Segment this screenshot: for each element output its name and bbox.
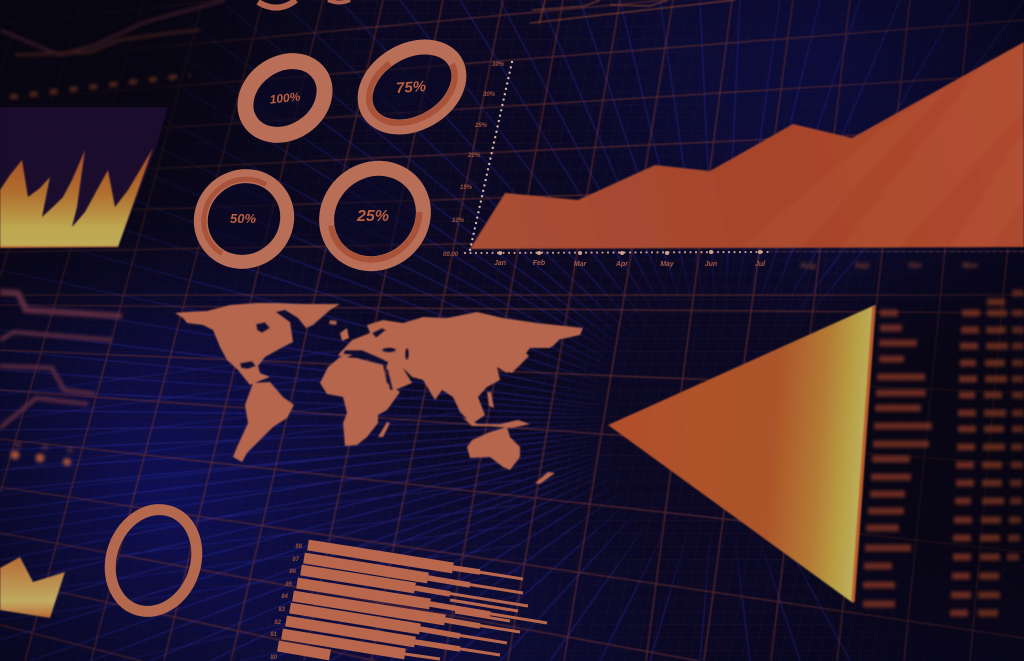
y axis labels: 15% bbox=[460, 185, 473, 191]
table values column 1 bbox=[950, 313, 980, 613]
funnel triangle bbox=[608, 305, 875, 603]
bars tapered middle bbox=[415, 568, 490, 649]
y axis labels bbox=[443, 62, 505, 258]
empty ring bbox=[96, 497, 211, 624]
Gulf of Mexico bbox=[240, 361, 256, 369]
bars solid bbox=[282, 545, 453, 654]
Philippines bbox=[487, 392, 494, 408]
x axis month dots bbox=[500, 252, 760, 253]
gauge 25%: 25% bbox=[356, 208, 389, 225]
bar labels: 83 bbox=[278, 607, 286, 613]
bar labels: 88 bbox=[295, 544, 303, 550]
bar labels: 82 bbox=[274, 620, 282, 626]
South America bbox=[233, 382, 294, 462]
bar labels: 80 bbox=[270, 655, 278, 661]
donut gauges bbox=[183, 31, 473, 283]
area fill bbox=[470, 42, 1024, 249]
y axis dots bbox=[470, 62, 512, 250]
Sakhalin bbox=[548, 337, 560, 347]
gauge 75%: 75% bbox=[395, 78, 427, 97]
gauge 25% bbox=[307, 149, 443, 283]
table values column 2 bbox=[978, 302, 1008, 613]
month labels bbox=[494, 260, 766, 268]
gauge 50%: 50% bbox=[230, 211, 256, 226]
Eurasia bbox=[338, 312, 583, 424]
top mini chart bbox=[530, 0, 735, 24]
bar labels: 86 bbox=[289, 569, 297, 575]
gauge 75% bbox=[351, 31, 473, 143]
Red Sea bbox=[385, 369, 393, 390]
Caspian bbox=[405, 348, 409, 360]
flame chart tick row bbox=[5, 255, 120, 261]
month labels: Jun bbox=[705, 261, 717, 268]
Madagascar bbox=[378, 422, 390, 437]
area chart bbox=[443, 42, 1024, 270]
circuit dots bbox=[10, 442, 73, 466]
UK bbox=[340, 328, 349, 341]
New Zealand bbox=[535, 472, 555, 484]
data table bbox=[863, 293, 1024, 613]
Japan bbox=[506, 352, 529, 373]
bar labels bbox=[270, 544, 303, 661]
y axis labels: 20% bbox=[467, 153, 481, 159]
y axis labels: 30% bbox=[483, 92, 496, 98]
month labels: May bbox=[660, 261, 675, 268]
dark chart panel behind flame bbox=[0, 107, 168, 248]
blurred month labels: Oct bbox=[908, 261, 922, 270]
Iceland bbox=[329, 320, 337, 325]
month labels: Jan bbox=[494, 260, 506, 267]
y axis labels: 00.00 bbox=[443, 252, 459, 258]
small yellow chart bbox=[0, 557, 65, 618]
gauge 100% bbox=[231, 46, 339, 150]
blurred month labels bbox=[799, 261, 978, 270]
blurred month labels: Nov bbox=[962, 261, 978, 270]
Mediterranean bbox=[343, 350, 385, 364]
month labels: Apr bbox=[615, 261, 629, 268]
table values column 3 bbox=[1007, 293, 1024, 557]
Africa bbox=[320, 357, 400, 446]
month labels: Feb bbox=[533, 260, 546, 267]
inland seas bbox=[240, 322, 409, 390]
month labels: Mar bbox=[574, 261, 587, 268]
table names column bbox=[863, 313, 932, 604]
top-left dim line chart panel bbox=[0, 0, 225, 97]
bars tails bbox=[405, 568, 547, 659]
Hudson Bay bbox=[256, 322, 270, 333]
area light streaks bbox=[740, 45, 1024, 248]
bars bottom row bbox=[278, 646, 330, 655]
Southeast Asia islands bbox=[462, 417, 530, 428]
flame area chart bbox=[0, 148, 153, 248]
blurred month labels: Aug bbox=[799, 261, 816, 270]
horizontal bar chart bbox=[270, 544, 547, 661]
North America and Greenland bbox=[175, 303, 340, 385]
Baltic bbox=[372, 328, 386, 338]
gauge 50% bbox=[183, 159, 305, 279]
bar labels: 85 bbox=[285, 582, 293, 588]
bar labels: 87 bbox=[292, 557, 300, 563]
left circuit diagram bbox=[0, 292, 122, 466]
world map bbox=[175, 303, 583, 484]
Australia bbox=[467, 427, 520, 470]
Black Sea bbox=[382, 348, 396, 352]
blurred month labels: Sep bbox=[855, 261, 869, 270]
bar labels: 84 bbox=[281, 594, 289, 600]
x axis dots blurred bbox=[770, 251, 1024, 252]
bar labels: 81 bbox=[270, 632, 278, 638]
month labels: Jul bbox=[755, 261, 766, 268]
y axis labels: 30% bbox=[492, 62, 505, 68]
top ring fragments bbox=[258, 0, 350, 8]
x axis dots bbox=[465, 252, 770, 253]
y axis labels: 10% bbox=[452, 218, 465, 224]
y axis labels: 25% bbox=[474, 123, 488, 129]
gauge 100%: 100% bbox=[269, 89, 301, 107]
